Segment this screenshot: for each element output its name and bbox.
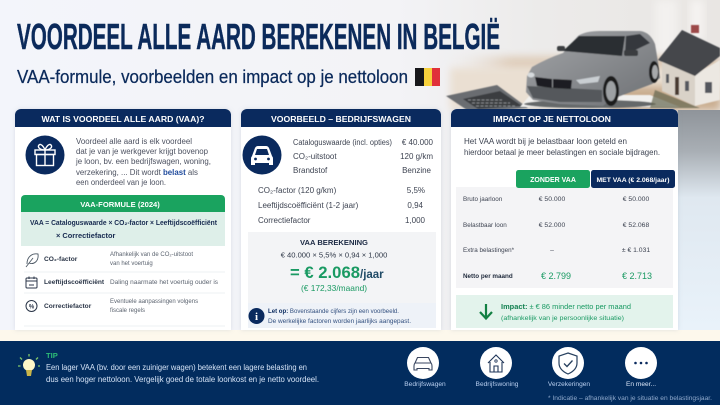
callout: let op: i bbox=[255, 311, 258, 323]
panel heading bbox=[451, 109, 678, 127]
icon: verzekeringen bbox=[548, 347, 590, 388]
icon: en meer bbox=[625, 347, 657, 388]
VAA berekening: (€ 172,33/maand) bbox=[301, 283, 367, 293]
factor list: Afhankelijk van de CO₂-uitstoot bbox=[110, 252, 193, 258]
illustration: calculator bbox=[446, 85, 528, 112]
VAA berekening bbox=[248, 232, 436, 303]
comparison table: MET VAA (€ 2.068/jaar) bbox=[596, 177, 670, 184]
panel heading: WAT IS VOORDEEL ALLE AARD (VAA)? bbox=[42, 114, 204, 124]
factor list: Eventuele aanpassingen volgens bbox=[110, 299, 198, 305]
intro text bbox=[75, 137, 211, 187]
panel heading bbox=[241, 109, 441, 127]
car specs: Brandstof bbox=[293, 166, 328, 175]
illustration: company car bbox=[520, 31, 680, 108]
factor list bbox=[24, 252, 225, 326]
icon: en meer: En meer... bbox=[626, 381, 656, 388]
panel: wat is voordeel alle aard bbox=[15, 109, 231, 330]
callout: impact bbox=[456, 295, 673, 328]
comparison table: Extra belastingen* bbox=[463, 247, 515, 254]
factors: Correctiefactor bbox=[258, 216, 311, 225]
factors: CO₂-factor (120 g/km) bbox=[258, 186, 337, 195]
comparison table: Bruto jaarloon bbox=[463, 196, 503, 203]
comparison table: € 2.713 bbox=[622, 271, 652, 281]
factor list: fiscale regels bbox=[110, 308, 145, 314]
comparison table: Netto per maand bbox=[463, 273, 513, 280]
icon: verzekeringen: Verzekeringen bbox=[548, 381, 590, 388]
comparison table: ± € 1.031 bbox=[622, 247, 650, 254]
VAA berekening: VAA BEREKENING bbox=[300, 238, 368, 247]
icon: car bbox=[242, 136, 282, 174]
factors: 1,000 bbox=[405, 216, 426, 225]
intro text: een onderdeel van je loon. bbox=[76, 178, 166, 187]
icon: bedrijfswoning bbox=[476, 347, 519, 388]
tip text: Een lager VAA (bv. door een zuiniger wagen) betekent een lagere belasting en bbox=[46, 363, 307, 372]
VAA berekening: = € 2.068 bbox=[290, 263, 360, 282]
icon: Belgian flag bbox=[415, 68, 440, 86]
icon: bedrijfswagen: Bedrijfswagen bbox=[404, 381, 446, 388]
panel heading bbox=[15, 109, 231, 127]
factors: 0,94 bbox=[407, 201, 424, 210]
tip text bbox=[46, 351, 319, 384]
icon: bedrijfswagen bbox=[404, 347, 446, 388]
icon: light bulb bbox=[18, 354, 40, 376]
factor list: Leeftijdscoëfficiënt bbox=[44, 279, 105, 286]
car specs: CO₂-uitstoot bbox=[293, 152, 337, 161]
formula box: VAA = Cataloguswaarde × CO₂-factor × Leeftijdscoëfficiënt bbox=[30, 218, 217, 227]
factors: 5,5% bbox=[407, 186, 425, 195]
icon: calendar bbox=[26, 276, 37, 288]
comparison table: € 2.799 bbox=[541, 271, 571, 281]
callout: impact: Impact: ± € 86 minder netto per maand bbox=[501, 302, 631, 311]
intro text: dat je van je werkgever krijgt bovenop bbox=[76, 147, 209, 156]
VAA berekening: /jaar bbox=[360, 269, 384, 281]
panel: voorbeeld bedrijfswagen bbox=[241, 109, 441, 330]
footnote: * Indicatie – afhankelijk van je situatie en belastingsjaar. bbox=[548, 396, 712, 402]
icon: percent bbox=[26, 300, 37, 312]
callout: let op: De werkelijke factoren worden jaarlijks aangepast. bbox=[268, 319, 411, 325]
comparison table: € 50.000 bbox=[623, 196, 649, 203]
formula box bbox=[21, 195, 225, 246]
intro text: je loon, bv. een bedrijfswagen, woning, bbox=[75, 157, 211, 166]
icon: bedrijfswoning: Bedrijfswoning bbox=[476, 381, 519, 388]
car specs bbox=[293, 138, 434, 175]
icon: leaf bbox=[26, 254, 38, 267]
comparison table: € 52.000 bbox=[539, 222, 565, 229]
intro text: verzekering, ... Dit wordt belast als bbox=[76, 168, 198, 177]
footer band bbox=[0, 341, 720, 405]
formula box: × Correctiefactor bbox=[56, 231, 115, 240]
comparison table: – bbox=[550, 247, 554, 254]
comparison table: € 50.000 bbox=[539, 196, 565, 203]
icon: gift bbox=[26, 136, 64, 174]
callout: let op bbox=[248, 303, 436, 328]
panel heading: VOORBEELD – BEDRIJFSWAGEN bbox=[271, 114, 411, 124]
factors bbox=[258, 186, 426, 225]
intro text: Voordeel alle aard is elk voordeel bbox=[76, 137, 192, 146]
factor list: van het voertuig bbox=[110, 261, 153, 267]
factor list: Daling naarmate het voertuig ouder is bbox=[110, 280, 218, 286]
car specs: € 40.000 bbox=[402, 138, 434, 147]
tip text: dus een hoger nettoloon. Vergelijk goed de totale loonkost en je netto voordeel. bbox=[46, 375, 319, 384]
car specs: 120 g/km bbox=[400, 152, 433, 161]
icon: percent: % bbox=[29, 304, 35, 310]
comparison table bbox=[456, 170, 675, 288]
car specs: Benzine bbox=[402, 166, 432, 175]
subtitle: VAA-formule, voorbeelden en impact op je nettoloon bbox=[17, 67, 408, 87]
tip text: TIP bbox=[46, 351, 58, 360]
panel heading: IMPACT OP JE NETTOLOON bbox=[493, 114, 611, 124]
intro text: hierdoor betaal je meer belastingen en sociale bijdragen. bbox=[464, 148, 660, 157]
illustration: model house bbox=[650, 25, 720, 108]
factors: Leeftijdscoëfficiënt (1-2 jaar) bbox=[258, 201, 359, 210]
comparison table: Belastbaar loon bbox=[463, 222, 507, 229]
factor list: Correctiefactor bbox=[44, 303, 92, 310]
panel: impact op je nettoloon bbox=[451, 109, 678, 330]
formula box: VAA-FORMULE (2024) bbox=[80, 200, 160, 209]
car specs: Cataloguswaarde (incl. opties) bbox=[293, 138, 392, 147]
callout: let op: Let op: Bovenstaande cijfers zijn een voorbeeld. bbox=[268, 309, 399, 315]
callout: impact: (afhankelijk van je persoonlijke situatie) bbox=[501, 315, 624, 322]
comparison table: € 52.068 bbox=[623, 222, 649, 229]
factor list: CO₂-factor bbox=[44, 256, 78, 263]
intro text: Het VAA wordt bij je belastbaar loon geteld en bbox=[464, 137, 627, 146]
intro text bbox=[464, 137, 660, 157]
VAA berekening: € 40.000 × 5,5% × 0,94 × 1,000 bbox=[281, 250, 387, 260]
comparison table: ZONDER VAA bbox=[530, 177, 576, 184]
